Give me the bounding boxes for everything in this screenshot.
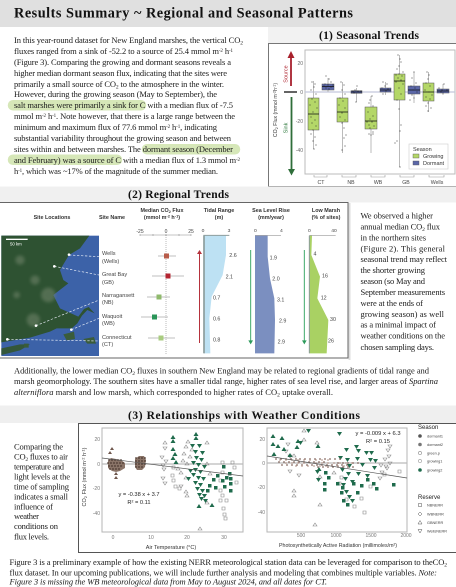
column headers: -1 [175, 214, 179, 218]
text block: year-round results: -1 [176, 125, 181, 130]
scatter: air temperature: -20 [93, 486, 100, 492]
scatter: air temperature: 30 [221, 535, 227, 541]
legend: season: Season [418, 425, 438, 431]
scatter: photosynthetically active radiation: 500 [297, 533, 305, 539]
y axis title: 2 [275, 127, 279, 129]
site names: (WB) [102, 321, 115, 327]
text block: year-round results: h [170, 122, 177, 132]
x labels: GB [402, 180, 410, 186]
site names: Wells [102, 251, 116, 257]
chart: low marsh: 16 [322, 273, 328, 279]
arrow: sink [284, 97, 295, 176]
scatter: air temperature: h [82, 453, 88, 458]
arrow: flux increases up [197, 250, 202, 343]
chart: tidal range: 0 [202, 228, 205, 234]
site names: Narragansett [102, 293, 135, 299]
column headers [34, 208, 341, 221]
scatter: air temperature: -40 [93, 511, 100, 517]
text block: year-round results: minimum and maximum flux of 77.6 mmol m [14, 122, 166, 132]
site names: (Wells) [102, 259, 119, 265]
chart: sea level rise: 1.9 [270, 255, 277, 261]
map of New England sites: 50 km [10, 241, 22, 246]
scatter: air temperature: CO [82, 498, 88, 506]
scatter: air temperature: 0 [97, 462, 100, 468]
text block: year-round results: primarily a small source of CO [14, 79, 116, 89]
column headers: Median CO [141, 208, 169, 214]
chart: sea level rise: 0 [254, 228, 257, 234]
heading: weather relationships [0, 406, 456, 423]
legend: Growing [423, 154, 443, 160]
text block: year-round results: . Note however, that there is a large range between the [56, 111, 235, 121]
text block: northern sites: September measurements [360, 287, 445, 297]
scatter: air temperature: -1 [80, 449, 86, 453]
chart: sea level rise: 3.1 [277, 297, 284, 303]
chart: median flux: 0 [165, 229, 168, 235]
text block: northern sites: season (so May and [360, 276, 426, 286]
y axis title: ) [273, 83, 279, 85]
legend: season: growing1 [427, 460, 442, 464]
chart: sea level rise: 4 [280, 228, 283, 234]
text block: geomorphology: Additionally, the lower median CO [14, 366, 132, 376]
text block: northern sites: annual median CO [360, 222, 422, 232]
scatter: photosynthetically active radiation: 2000 [400, 533, 412, 539]
text block: weather comparison: fluxes to air [28, 452, 68, 462]
site names: Waquoit [102, 314, 123, 320]
text block: weather comparison: conditions on [14, 521, 59, 531]
scatter: air temperature: 20 [184, 535, 190, 541]
scatter: photosynthetically active radiation: R² = 0.15 [366, 439, 390, 445]
chart: sea level rise: 2.9 [278, 339, 285, 345]
text block: northern sites: the shorter growing [360, 265, 426, 275]
chart: low marsh [302, 228, 337, 353]
scatter: air temperature: R² = 0.11 [127, 500, 151, 506]
scatter: photosynthetically active radiation: 1500 [365, 533, 377, 539]
text block: year-round results [8, 35, 243, 176]
site names: (GB) [102, 280, 114, 286]
column headers: ) [178, 215, 180, 221]
scatter: photosynthetically active radiation: 20 [259, 437, 265, 443]
scatter: air temperature: 0 [112, 535, 115, 541]
site names: Great Bay [102, 272, 127, 278]
text block: northern sites: growing season) as well [360, 309, 445, 319]
text block: figure 3 note [8, 557, 447, 586]
chart: tidal range: 2.6 [229, 253, 237, 259]
scatter: photosynthetically active radiation: y = -0.009 x + 6.3 [355, 431, 401, 437]
text block: year-round results: -1 [18, 169, 23, 174]
plot: 0 [300, 90, 303, 96]
text block: year-round results: -2 [166, 125, 171, 130]
data points [310, 55, 447, 167]
arrow: sink: Sink [284, 122, 290, 133]
column headers: Site Locations [34, 215, 70, 221]
text block: year-round results: -2 [42, 114, 47, 119]
text block: year-round results: -2 [236, 158, 240, 163]
scatter: photosynthetically active radiation [258, 428, 412, 549]
panel: regional trends [0, 202, 350, 360]
text block: weather comparison: influence of [14, 502, 53, 512]
text block: year-round results: However, during the growing season (May to September), the [14, 89, 217, 99]
text block: year-round results: higher median dormant season flux, indicating that the sites were [14, 68, 227, 78]
chart: tidal range: 0.7 [213, 295, 220, 301]
column headers: Flux [171, 208, 183, 214]
legend: season: green.p [427, 452, 440, 456]
text block: geomorphology: 2 [277, 392, 280, 398]
heading: regional trends [0, 186, 456, 202]
y axis title: Flux (mmol m [273, 94, 279, 127]
text block: weather comparison: 2 [25, 457, 28, 463]
text block: northern sites: 2 [422, 227, 425, 233]
plot: -40 [296, 148, 303, 154]
legend: Season [413, 147, 432, 153]
text block: year-round results: substantial variability throughout the growing season and between [14, 133, 232, 143]
legend: season: growing2 [427, 468, 442, 472]
text block: year-round results: -1 [52, 114, 57, 119]
column headers: 2 [169, 209, 172, 214]
text block: northern sites: We observed a higher [360, 210, 433, 220]
legend: season: dormant2 [427, 443, 443, 447]
scatter: air temperature: -2 [80, 457, 86, 461]
text block: year-round results: , indicating [180, 122, 218, 132]
x labels: NB [347, 180, 355, 186]
column headers: -2 [166, 214, 171, 218]
text block: weather comparison [14, 442, 70, 542]
site names: Connecticut [102, 335, 132, 341]
legend: reserve: Reserve [418, 495, 441, 501]
text block: year-round results: (Figure 3). Comparing the growing and dormant seasons reveals a [14, 57, 231, 67]
text block: year-round results: fluxes ranged from a sink of -52.2 to a source of 25.4 mmol m [14, 46, 219, 56]
text block: year-round results: mmol m [14, 111, 42, 121]
chart: tidal range: 0.6 [213, 316, 220, 322]
text block: northern sites: flux [425, 222, 441, 232]
scatter: air temperature: ) [82, 447, 88, 449]
column headers: Tidal Range [204, 208, 234, 214]
x labels: CT [318, 180, 325, 186]
text block: year-round results: -2 [219, 49, 223, 54]
text block: figure 3 note: flux dataset. In our upcoming publications, we will include further analysis and modeling that combines multiple variables. Note: [10, 568, 437, 578]
column headers: (mmol m [144, 215, 166, 221]
scatter: photosynthetically active radiation: -20 [258, 485, 265, 491]
text block: northern sites: chosen sampling days. [360, 342, 434, 352]
text block: northern sites: were at the ends of [360, 298, 423, 308]
legend: reserve: NBNERR [427, 504, 443, 508]
y axis title: CO [273, 129, 279, 137]
x labels: Wells [431, 180, 444, 186]
text block: year-round results: 2 [240, 40, 243, 46]
chart: sea level rise: 2.9 [279, 318, 286, 324]
text block: year-round results: -1 [229, 49, 234, 54]
text block: weather comparison: CO [14, 452, 26, 462]
text block: northern sites: (Figure 2). This general [360, 244, 446, 254]
zero marker [284, 91, 297, 93]
legend [409, 144, 448, 169]
chart: sea level rise [248, 228, 286, 353]
arrow: source [284, 51, 294, 86]
x labels [314, 175, 444, 186]
text block: geomorphology: marsh geomorphology. The southern sites have a smaller tidal range, higher rates of sea level rise, and larger areas of Spartina [14, 376, 438, 386]
heading: regional trends: (2) Regional Trends [128, 189, 230, 201]
text block: year-round results: h [223, 46, 230, 56]
chart: low marsh: 0 [308, 228, 311, 234]
boxes: growing [308, 74, 434, 130]
site names [102, 251, 135, 348]
text block: geomorphology [14, 366, 438, 398]
chart: low marsh: 12 [321, 295, 327, 301]
chart: median flux: -25 [136, 229, 144, 235]
text block: northern sites: weather conditions on the [360, 330, 445, 340]
text block: weather comparison: flux levels. [14, 532, 49, 542]
text block: weather comparison: indicates a small [14, 492, 69, 502]
scatter: photosynthetically active radiation: 0 [262, 461, 265, 467]
chart: sea level rise: 2.0 [272, 276, 280, 282]
boxes: dormant [322, 84, 449, 94]
chart: tidal range [202, 228, 237, 353]
heading: seasonal trends: (1) Seasonal Trends [319, 30, 420, 42]
column headers: (% of sites) [312, 215, 341, 221]
y axis title: -1 [272, 85, 276, 88]
column headers: Low Marsh [312, 208, 340, 214]
arrow: source: Source [284, 65, 290, 83]
text block: geomorphology: 2 [132, 371, 135, 377]
scatter: air temperature: Flux (mmol m [82, 461, 88, 496]
text block: year-round results: sites within and between marshes. The dormant season (December [14, 144, 233, 154]
column headers: (m) [215, 215, 223, 221]
scatter: photosynthetically active radiation: 1000 [330, 533, 342, 539]
x labels: WB [374, 180, 383, 186]
chart: low marsh: 26 [328, 338, 334, 344]
text block: northern sites: seasonal trend may reflect [360, 254, 448, 264]
scatter: air temperature: y = -0.38 x + 3.7 [118, 492, 160, 498]
title [0, 0, 456, 27]
text block: year-round results: h [14, 166, 18, 176]
text block: figure 3 note: Figure 3 is a preliminary example of how the existing NERR meteorological station data can be leveraged for comparison to theCO [10, 557, 444, 567]
y axis title: h [273, 88, 279, 91]
legend: reserve: GBNERR [427, 521, 444, 525]
site names: (CT) [102, 342, 113, 348]
column headers: h [170, 215, 175, 221]
text block: figure 3 note: 2 [444, 562, 447, 568]
column headers: Site Name [99, 215, 125, 221]
chart: low marsh: 30 [330, 317, 336, 323]
title: Results Summary ~ Regional and Seasonal Patterns [14, 6, 353, 22]
text block: weather comparison: weather [14, 511, 39, 521]
scatter: air temperature: 10 [148, 535, 154, 541]
scatter: air temperature: 20 [94, 437, 100, 443]
panel: weather scatter plots [78, 424, 456, 552]
text block: figure 3 note: Figure 3 is missing the WB meteorological data from May to August 2024, and all dates for CT. [8, 576, 327, 586]
column headers: (mm/year) [258, 215, 284, 221]
scatter: air temperature: Air Temperature (°C) [146, 545, 196, 551]
chart: tidal range: 0.8 [213, 338, 220, 344]
chart: tidal range: 3 [228, 228, 231, 234]
legend: reserve: WellsNERR [427, 530, 447, 534]
text block: northern sites: as a minimal impact of [360, 320, 436, 330]
legend: season [418, 425, 443, 472]
text block: geomorphology: uptake overall. [280, 387, 333, 397]
text block: weather comparison: Comparing the [14, 442, 63, 452]
text block: weather comparison: temperature and [14, 462, 65, 472]
text block: year-round results: to the atmosphere in the winter. [119, 79, 224, 89]
heading: seasonal trends [268, 27, 456, 43]
text block: northern sites [360, 210, 448, 352]
plot [296, 50, 455, 186]
chart: low marsh: 40 [331, 228, 337, 234]
scatter: photosynthetically active radiation: -40 [258, 510, 265, 516]
scatter: air temperature: 2 [83, 495, 88, 498]
text block: geomorphology: alterniflora marsh and low marsh, which corresponded to higher rates of CO [14, 387, 277, 397]
legend: Dormant [423, 161, 445, 167]
chart: tidal range: 2.1 [226, 274, 233, 280]
text block: year-round results: , which was ~17% of the magnitude of the summer median. [22, 166, 218, 176]
text block: northern sites: in the northern sites [360, 232, 426, 242]
text block: geomorphology: fluxes in southern New England may be related to regional gradients of tidal range and [135, 366, 430, 376]
panel: seasonal trends box plot [268, 44, 456, 186]
y axis title: -2 [272, 91, 276, 94]
text block: year-round results: and February) was a source of C with a median flux of 1.3 mmol m [14, 155, 236, 165]
legend: season: dormant1 [427, 434, 443, 438]
text block: year-round results: salt marshes were primarily a sink for C with a median flux of -7.5 [14, 100, 233, 110]
chart: low marsh: 4 [314, 252, 317, 258]
legend: reserve: WBNERR [427, 512, 444, 516]
text block: year-round results: 2 [116, 84, 119, 90]
text block: weather comparison: light levels at the [14, 472, 70, 482]
scatter: photosynthetically active radiation: Photosynthetically Active Radiation (millimoles/m²) [279, 543, 397, 549]
legend: reserve [418, 495, 447, 534]
text block: weather comparison: time of sampling [14, 482, 70, 492]
text block: year-round results: h [46, 111, 53, 121]
map of New England sites [1, 236, 99, 356]
chart: median flux [136, 229, 194, 355]
chart: median flux: 25 [188, 229, 194, 235]
site names: (NB) [102, 300, 114, 306]
plot: 20 [297, 61, 303, 67]
scatter: air temperature [80, 428, 243, 551]
heading: weather relationships: (3) Relationships with Weather Conditions [128, 410, 361, 422]
text block: year-round results: In this year-round dataset for New England marshes, the vertical CO [14, 35, 240, 45]
column headers: Sea Level Rise [252, 208, 290, 214]
plot: -20 [296, 119, 303, 125]
